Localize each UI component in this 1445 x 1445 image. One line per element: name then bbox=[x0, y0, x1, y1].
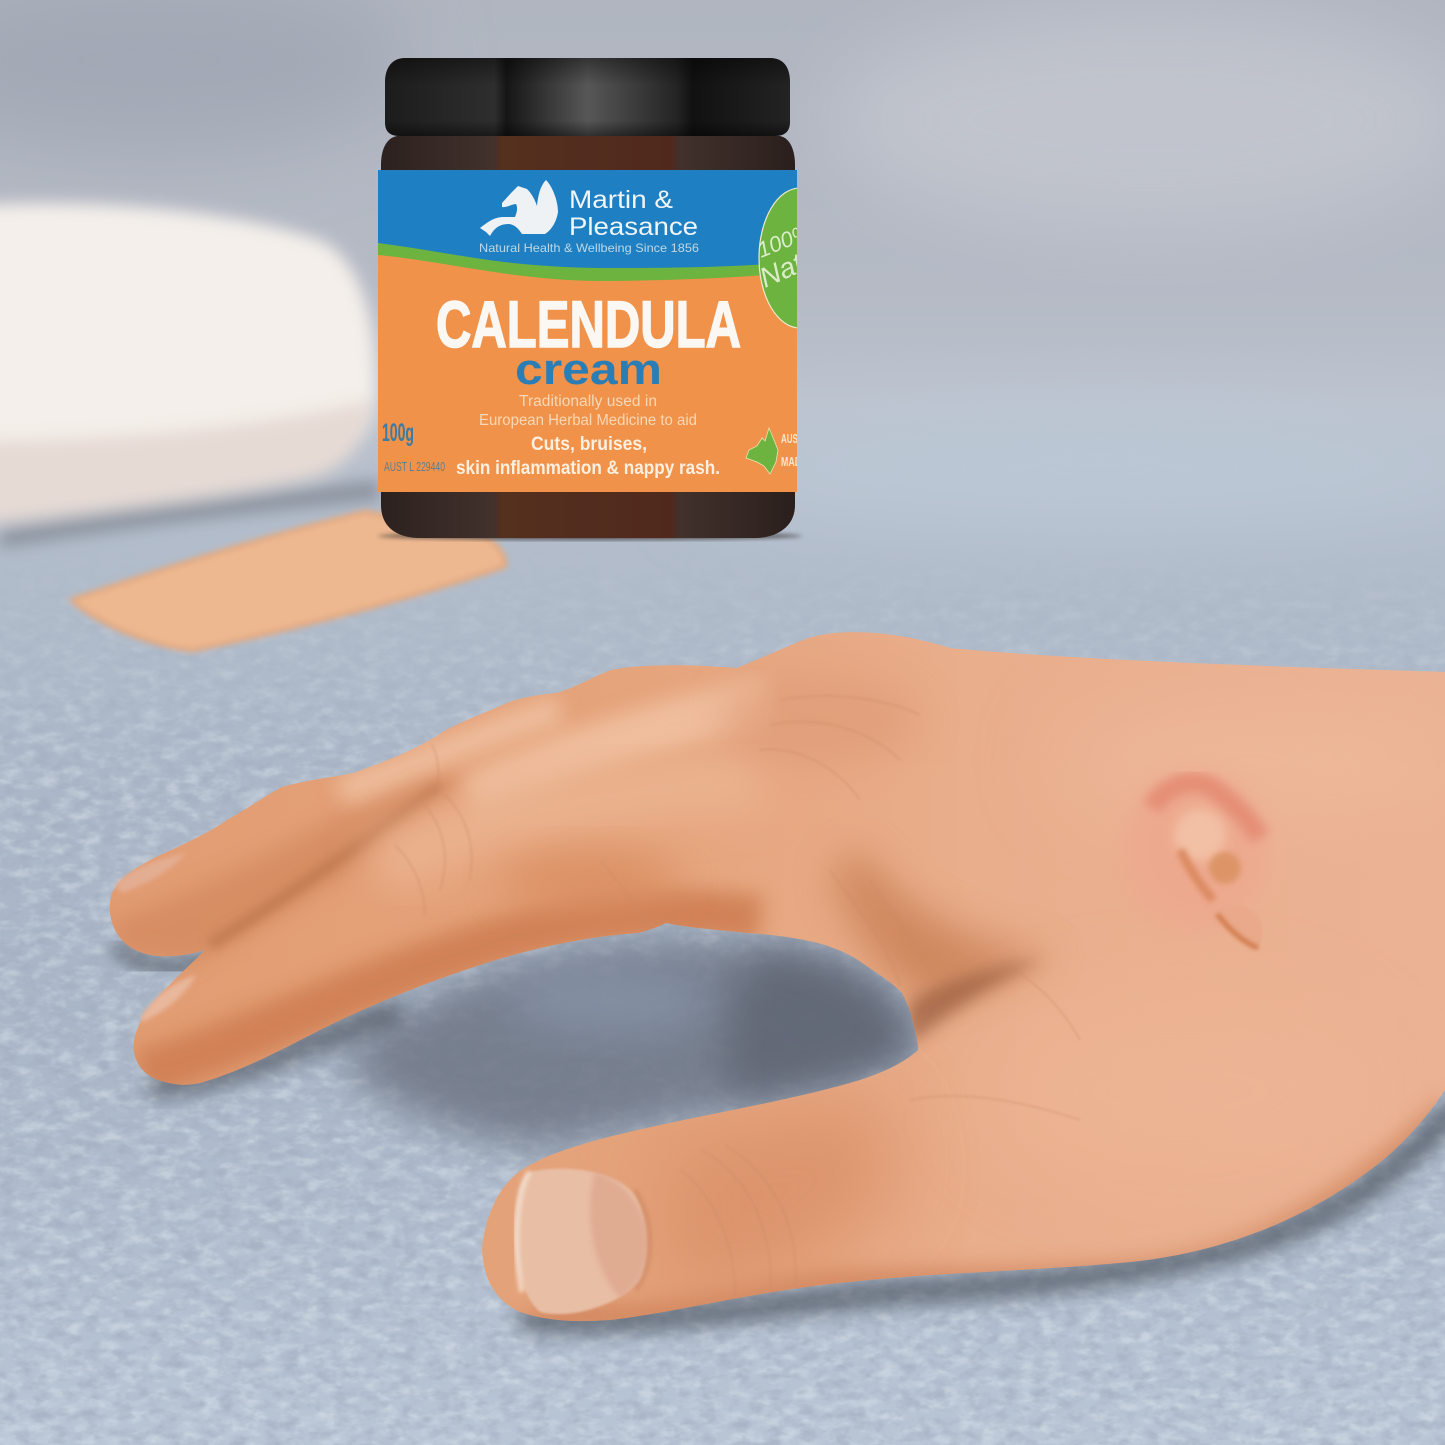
australian made text: AUSTRALIAN bbox=[781, 431, 833, 446]
skin creases bbox=[399, 746, 1080, 1120]
white rolled towel bbox=[0, 203, 380, 548]
product jar: skin inflammation & nappy rash. bbox=[456, 458, 720, 479]
natural badge bbox=[758, 188, 797, 328]
hand base shape bbox=[110, 632, 1445, 1321]
orange label bbox=[378, 255, 797, 492]
adhesive bandage bbox=[72, 512, 505, 650]
blue label band bbox=[378, 170, 797, 268]
icon: australia map bbox=[746, 428, 778, 474]
uses: Cuts, bruises, bbox=[531, 434, 647, 455]
description: Traditionally used in bbox=[519, 393, 657, 410]
product jar bbox=[378, 58, 797, 538]
thumbnail bbox=[514, 1169, 650, 1314]
aust code: AUST L 229440 bbox=[384, 459, 445, 474]
hand with burn bbox=[110, 632, 1445, 1330]
burn wound bbox=[1123, 770, 1267, 948]
australian made text 2: MADE bbox=[781, 454, 807, 469]
brand name: Martin & bbox=[569, 186, 673, 214]
brand logo: pegasus bbox=[480, 180, 558, 236]
middle fingernail bbox=[140, 975, 196, 1022]
product jar: Pleasance bbox=[569, 213, 698, 241]
shadow under the hand bbox=[115, 940, 1445, 1321]
brand tagline: Natural Health & Wellbeing Since 1856 bbox=[479, 241, 699, 255]
hand shading bbox=[110, 675, 1445, 1330]
natural badge: 100% bbox=[754, 218, 815, 263]
product jar: European Herbal Medicine to aid bbox=[479, 412, 697, 429]
product name: CALENDULA bbox=[436, 287, 741, 361]
net weight: 100g bbox=[382, 419, 414, 447]
natural badge: Natural bbox=[755, 228, 851, 293]
black lid bbox=[385, 58, 790, 136]
glass body bbox=[381, 136, 795, 538]
product type: cream bbox=[515, 345, 662, 394]
jar shadow bbox=[378, 532, 802, 540]
green swoosh bbox=[378, 243, 760, 281]
index fingernail bbox=[115, 853, 186, 893]
